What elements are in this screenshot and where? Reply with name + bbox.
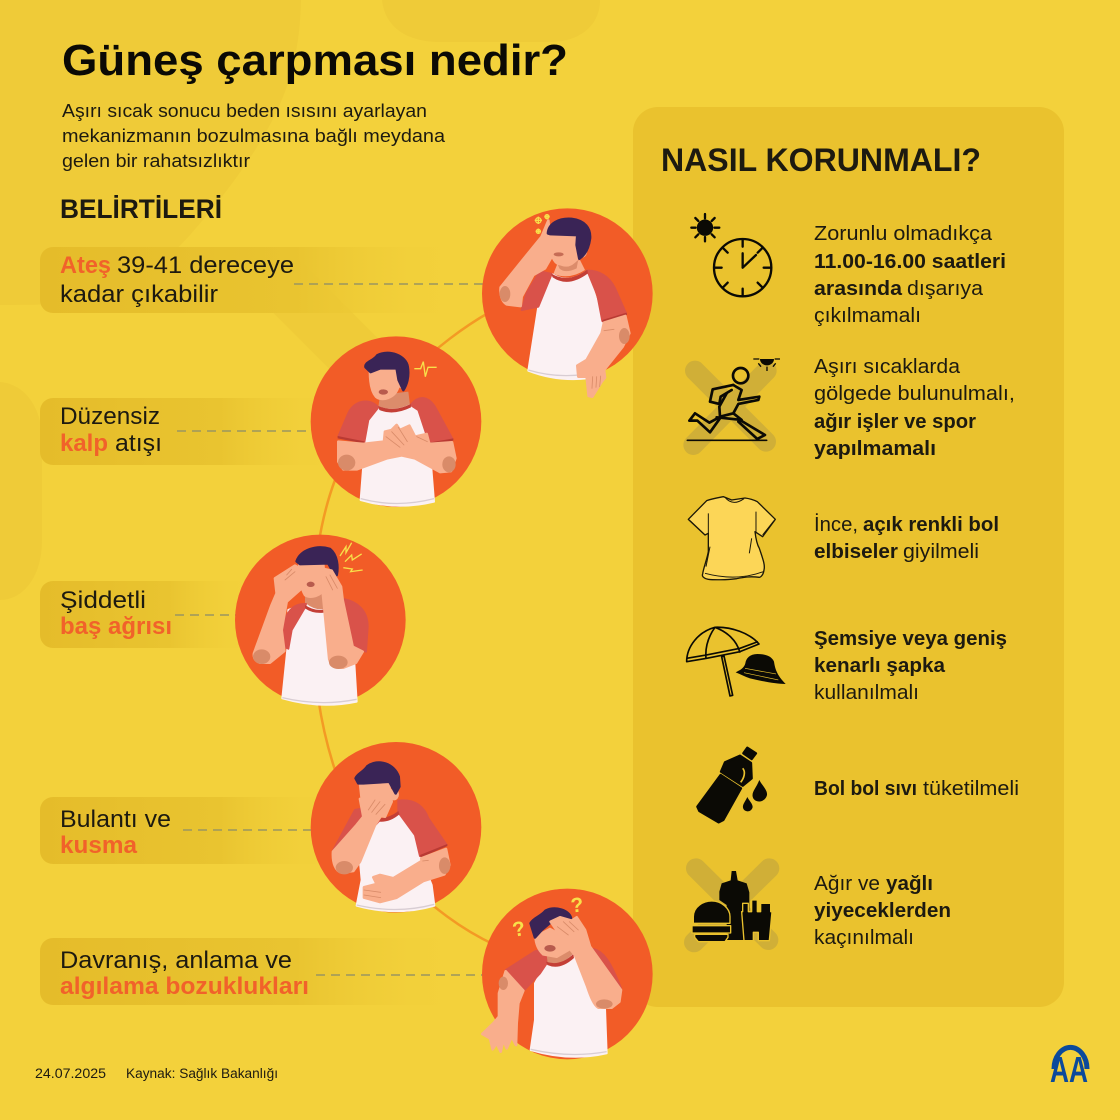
tip 5 text: tüketilmeli <box>923 778 1019 800</box>
tip 4 text <box>814 628 1007 704</box>
symptom 4 text <box>60 806 171 859</box>
symptom 3 text: baş ağrısı <box>60 613 172 640</box>
tip 1 text: Zorunlu olmadıkça <box>814 223 993 245</box>
symptom 4 text: Bulantı ve <box>60 806 171 833</box>
tip 6 text <box>814 873 951 949</box>
heading: how to protect: NASIL KORUNMALI? <box>661 142 981 178</box>
symptom 1 text <box>60 252 294 308</box>
footer date and source <box>35 1066 278 1081</box>
title: Güneş çarpması nedir? <box>62 36 568 85</box>
heading: symptoms: BELİRTİLERİ <box>60 194 222 224</box>
symptom 2 text <box>60 403 162 457</box>
tip 4 text: kenarlı şapka <box>814 655 946 677</box>
tip 1 text: arasında <box>814 278 903 300</box>
icon: fast food crossed out <box>692 868 772 942</box>
icon: water bottle <box>697 748 767 822</box>
tip 2 text: gölgede bulunulmalı, <box>814 383 1015 405</box>
figure 5: confusion <box>482 889 653 1059</box>
icon: t-shirt <box>688 497 775 580</box>
panel: how to protect <box>633 107 1064 1007</box>
connecting arc <box>312 312 495 945</box>
footer date and source: 24.07.2025 <box>35 1066 106 1081</box>
tip 2 text: yapılmamalı <box>814 438 936 460</box>
tip 1 text: çıkılmamalı <box>814 305 921 327</box>
symptom 3 text <box>60 587 172 640</box>
background shapes <box>0 0 600 600</box>
tip 3 text <box>814 513 999 563</box>
intro text <box>62 101 446 171</box>
tip 6 text: yağlı <box>886 873 933 895</box>
tip 6 text: Ağır ve <box>814 873 880 895</box>
symptom pills and dashed leaders <box>40 247 484 1005</box>
figure 2: heart <box>311 336 481 507</box>
tip 5 text: Bol bol sıvı <box>814 778 917 800</box>
icon: sun and clock <box>691 214 771 296</box>
tip 4 text: Şemsiye veya geniş <box>814 628 1007 650</box>
tip 2 text <box>814 356 1015 460</box>
tip 1 text: 11.00-16.00 saatleri <box>814 251 1006 273</box>
figure 5: confusion: ? <box>511 917 527 942</box>
symptom 5 text: Davranış, anlama ve <box>60 947 292 974</box>
symptom 1 text: kadar çıkabilir <box>60 281 218 308</box>
tip 3 text: giyilmeli <box>903 541 979 563</box>
footer date and source: Kaynak: Sağlık Bakanlığı <box>126 1066 278 1081</box>
tip 2 text: ağır işler ve spor <box>814 411 976 433</box>
symptom 2 text: Düzensiz <box>60 403 160 430</box>
symptom 3 text: Şiddetli <box>60 587 146 614</box>
tip 3 text: açık renkli bol <box>863 514 999 536</box>
tip 5 text <box>814 778 1019 800</box>
intro text: Aşırı sıcak sonucu beden ısısını ayarlayan <box>62 101 427 121</box>
figure 1: fever <box>482 208 653 397</box>
icon: umbrella and hat <box>687 627 786 696</box>
icon: runner crossed out <box>687 359 780 445</box>
symptom 4 text: kusma <box>60 832 137 859</box>
intro text: gelen bir rahatsızlıktır <box>62 151 250 171</box>
figure 5: confusion: ? <box>570 893 584 917</box>
tip 3 text: elbiseler <box>814 541 898 563</box>
tip 2 text: Aşırı sıcaklarda <box>814 356 961 378</box>
tip 1 text <box>814 223 1006 327</box>
logo: AA: AA <box>1050 1049 1088 1090</box>
tip 6 text: kaçınılmalı <box>814 927 914 949</box>
tip 6 text: yiyeceklerden <box>814 900 951 922</box>
symptom 2 text: atışı <box>115 430 162 457</box>
figure 4: nausea <box>311 742 481 913</box>
symptom 5 text <box>60 947 309 1000</box>
figure 3: headache <box>235 535 406 705</box>
tip 3 text: İnce, <box>814 513 858 536</box>
symptom 1 text: Ateş <box>60 252 111 279</box>
tip 4 text: kullanılmalı <box>814 682 919 704</box>
symptom 1 text: 39-41 dereceye <box>117 252 294 279</box>
symptom 5 text: algılama bozuklukları <box>60 973 309 1000</box>
symptom 2 text: kalp <box>60 430 108 457</box>
tip 1 text: dışarıya <box>907 278 984 300</box>
intro text: mekanizmanın bozulmasına bağlı meydana <box>62 126 446 146</box>
